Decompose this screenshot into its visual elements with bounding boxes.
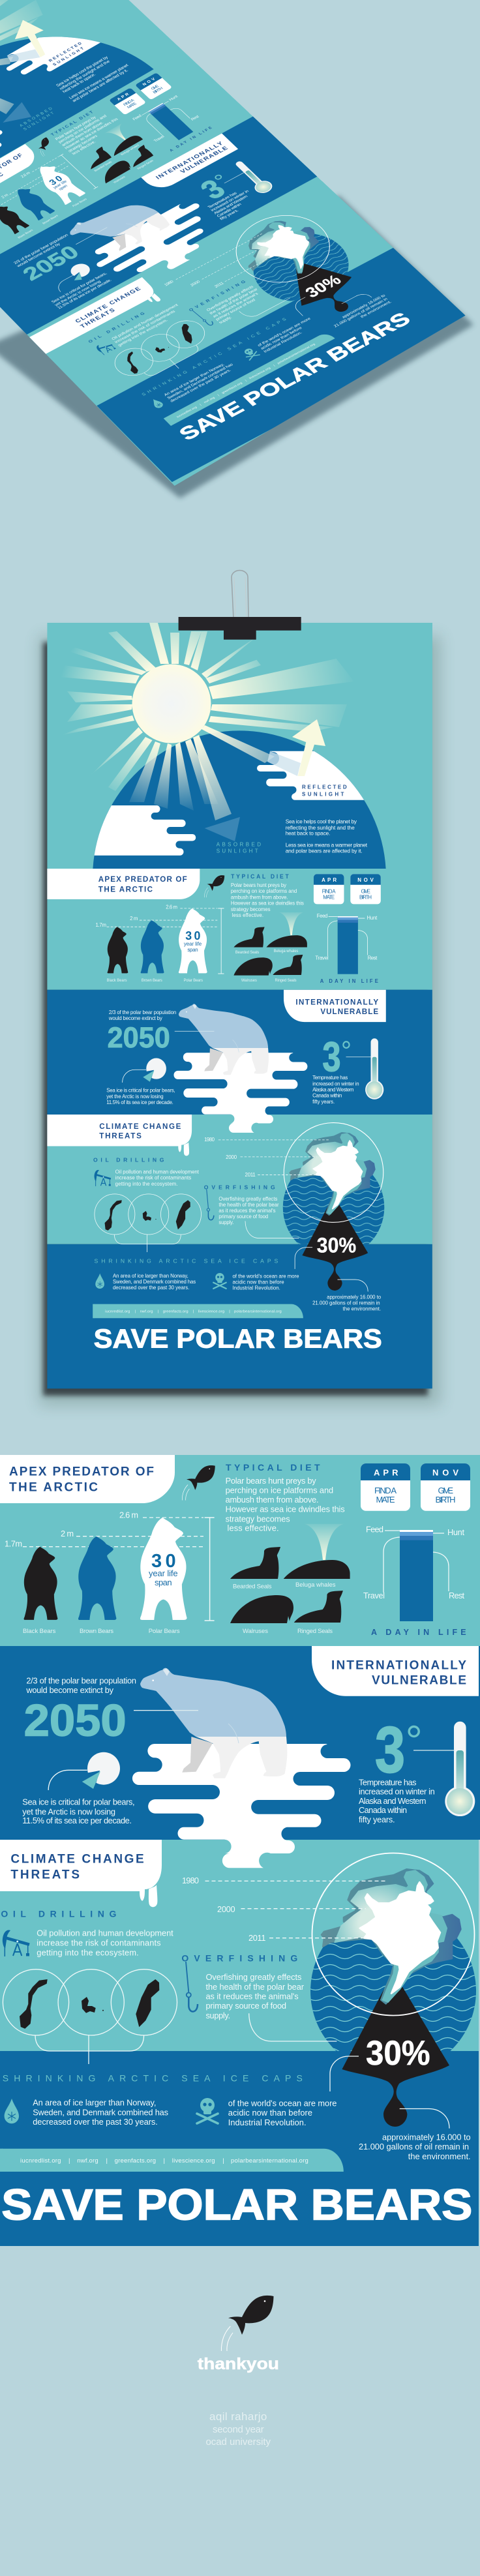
text: ocean acidity: of the world's ocean are more: [228, 2099, 337, 2108]
ice timeline labels: 2011: [248, 1933, 266, 1943]
text: typical diet: [226, 1476, 345, 1533]
label: absorbed sunlight: ABSORBED: [217, 841, 261, 847]
polar bear with lifespan: [140, 1518, 187, 1620]
card: april: [361, 1463, 410, 1511]
arctic ice extent 2000: [335, 1870, 447, 2002]
card: november: BIRTH: [436, 1495, 455, 1505]
heading: internationally vulnerable: [312, 1646, 479, 1696]
text: ocean acidity: [228, 2099, 337, 2127]
bear height guides: [5, 1510, 215, 1621]
reflected sunlight arrow: [292, 719, 325, 776]
thermometer: [413, 1722, 475, 1816]
3 degree figure: 3: [375, 1714, 405, 1787]
card: april: FIND A: [374, 1486, 397, 1495]
day in life bar: Travel: [363, 1591, 385, 1600]
heading: apex predator: THE ARCTIC: [9, 1481, 98, 1495]
text: overfishing: [206, 1972, 305, 2020]
heading: shrinking arctic sea ice caps: SHRINKING ARCTIC SEA ICE CAPS: [3, 2073, 303, 2084]
card: november: NOV: [432, 1468, 458, 1478]
black bear: [24, 1547, 57, 1620]
bear height guides: 1.7m: [5, 1539, 22, 1549]
text: extinction: [25, 1676, 136, 1695]
heading: internationally vulnerable: VULNERABLE: [372, 1673, 466, 1687]
connector: 30%: [330, 2056, 359, 2091]
text: temperature: Alaska and Western: [359, 1796, 427, 1806]
text: temperature: [359, 1777, 435, 1824]
polar bear with lifespan: 30: [151, 1551, 176, 1572]
sources strip: polarbearsinternational.org: [231, 2157, 308, 2164]
sun rays: [51, 623, 354, 820]
text: sea ice loss: [22, 1797, 135, 1825]
day in life bar: Rest: [449, 1591, 464, 1600]
sources strip: |: [163, 2157, 165, 2164]
text: oil drilling: [37, 1928, 173, 1957]
text: typical diet: perching on ice platforms and: [226, 1485, 333, 1495]
prey labels: Walruses: [243, 1628, 268, 1635]
text: gallons of oil: [359, 2132, 471, 2161]
arctic ice extent 1980: [322, 1869, 461, 2004]
detail: apex predator section: [0, 1455, 480, 1646]
sources strip: [0, 2149, 344, 2172]
heading: climate change threats: CLIMATE CHANGE: [10, 1853, 144, 1866]
connector: 2050: [134, 1710, 198, 1711]
main title: SAVE POLAR BEARS: [1, 2181, 472, 2229]
polar bear with lifespan: year life: [149, 1568, 178, 1578]
bear eye and ear: [152, 1668, 239, 1743]
text: sea ice loss: 11.5% of its sea ice per decade.: [22, 1816, 132, 1825]
poster mockup shadow: [0, 196, 473, 498]
ringed seal: [294, 1591, 343, 1623]
text: temperature: Tempreature has: [359, 1777, 416, 1787]
arctic ice today: [360, 1882, 440, 1994]
walking polar bear: [140, 1668, 287, 1778]
text: overfishing: as it reduces the animal's: [206, 1992, 299, 2001]
walrus: [230, 1595, 293, 1623]
sources strip: |: [68, 2157, 70, 2164]
day in life bar: [363, 1524, 464, 1621]
label: absorbed sunlight: SUNLIGHT: [217, 848, 258, 854]
polar bear with lifespan: span: [155, 1578, 172, 1587]
text: gallons of oil: approximately 16.000 to: [382, 2132, 471, 2142]
heading: typical diet: TYPICAL DIET: [226, 1462, 320, 1473]
ice timeline labels: 1980: [182, 1876, 199, 1885]
text: sea ice cools planet: Less sea ice means a warmer planet: [286, 842, 368, 848]
label: absorbed sunlight: [217, 841, 261, 854]
text: oil drilling: increase the risk of contaminants: [37, 1938, 160, 1947]
dome of sea: [93, 730, 386, 869]
text: temperature: fifty years.: [359, 1814, 395, 1824]
card: april: APR: [374, 1468, 398, 1478]
bear labels: [23, 1628, 180, 1635]
whale spout: [305, 1524, 344, 1560]
text: overfishing: primary source of food: [206, 2001, 286, 2011]
heading: internationally vulnerable: INTERNATIONALLY: [331, 1658, 466, 1672]
text: overfishing: Overfishing greatly effects: [206, 1972, 301, 1982]
icon: ice pie: [48, 1752, 120, 1790]
bear labels: Brown Bears: [80, 1628, 113, 1635]
2050 figure: 2050: [24, 1696, 127, 1745]
sources strip: |: [106, 2157, 108, 2164]
text: sea ice cools planet: reflecting the sunlight and the: [286, 824, 355, 831]
heading: apex predator: APEX PREDATOR OF: [9, 1465, 154, 1479]
prey labels: Ringed Seals: [297, 1628, 333, 1635]
text: sea ice loss: Sea ice is critical for polar bears,: [22, 1797, 135, 1806]
card: november: [421, 1463, 470, 1511]
text: oil drilling: Oil pollution and human development: [37, 1928, 173, 1938]
icon: fish hook: [186, 1962, 198, 2012]
author credit: ocad university: [206, 2436, 271, 2448]
sources strip: greenfacts.org: [115, 2157, 156, 2164]
bear labels: Black Bears: [23, 1628, 56, 1635]
text: ice area: Sweden, and Denmark combined has: [33, 2108, 168, 2117]
thin ring around ice: [312, 1853, 475, 2015]
author credit: [206, 2410, 271, 2448]
text: temperature: increased on winter in: [359, 1787, 435, 1797]
prey labels: [233, 1581, 336, 1635]
text: typical diet: strategy becomes: [226, 1514, 290, 1523]
connector: oil drop: [400, 2109, 449, 2129]
text: oil drilling: getting into the ecosystem.: [37, 1947, 139, 1957]
heading: climate change threats: [0, 1840, 162, 1907]
icon: skull and bones: [197, 2098, 218, 2123]
text: gallons of oil: 21.000 gallons of oil remain in: [359, 2142, 469, 2151]
icon: fish: [182, 1465, 215, 1501]
venn circles: norway, denmark, sweden: [3, 1969, 177, 2064]
far leg of bear: [182, 1737, 213, 1773]
oil drop with black flask: [342, 1971, 449, 2127]
label: reflected sunlight: SUNLIGHT: [302, 792, 344, 798]
poster mockup in perspective: [0, 0, 472, 486]
heading: a day in life: A DAY IN LIFE: [371, 1628, 466, 1637]
text: ocean acidity: acidic now than before: [228, 2108, 312, 2118]
card: november: GIVE: [438, 1486, 453, 1495]
heading: apex predator: [0, 1455, 175, 1503]
sources strip: iucnredlist.org: [20, 2157, 61, 2164]
text: sea ice loss: yet the Arctic is now losing: [22, 1806, 115, 1816]
text: temperature: Canada within: [359, 1805, 407, 1815]
text: ice area: [33, 2098, 168, 2127]
sun: [132, 664, 211, 743]
heading: climate change threats: THREATS: [10, 1868, 80, 1882]
prey labels: Bearded Seals: [233, 1583, 272, 1591]
bearded seal: [230, 1547, 280, 1579]
text: extinction: would become extinct by: [25, 1685, 114, 1695]
heading: overfishing: OVERFISHING: [181, 1953, 297, 1964]
beluga whale: [284, 1560, 350, 1579]
hanging poster lower sections: [47, 869, 432, 1388]
hanging poster shadow: [39, 636, 440, 1405]
text: sea ice cools planet: heat back to space.: [286, 830, 330, 837]
text: ice area: decreased over the past 30 years.: [33, 2117, 158, 2127]
text: sea ice cools planet: [286, 818, 368, 854]
sources strip: nwf.org: [77, 2157, 98, 2164]
label: reflected sunlight: [302, 784, 347, 798]
ice timeline labels: [182, 1876, 386, 1943]
bear height guides: 2.6 m: [119, 1510, 138, 1520]
heading: oil drilling: OIL DRILLING: [1, 1908, 117, 1919]
30% figure: 30%: [366, 2034, 430, 2073]
text: typical diet: ambush them from above.: [226, 1495, 319, 1505]
binder clip: [179, 571, 301, 640]
melting ice sheet: [132, 1744, 350, 1868]
text: ocean acidity: Industrial Revolution.: [228, 2118, 307, 2127]
text: typical diet: less effective.: [227, 1523, 279, 1533]
bear labels: Polar Bears: [149, 1628, 180, 1635]
text: overfishing: supply.: [206, 2011, 230, 2020]
text: typical diet: Polar bears hunt preys by: [226, 1476, 316, 1486]
connector: overfishing: [249, 2013, 337, 2041]
brown bear: [78, 1536, 116, 1620]
reflected streak on ice: [267, 751, 301, 776]
sources strip: livescience.org: [172, 2157, 215, 2164]
day in life bar: Hunt: [447, 1527, 464, 1537]
text: ice area: An area of ice larger than Norway,: [33, 2098, 156, 2108]
text: extinction: 2/3 of the polar bear population: [26, 1676, 136, 1686]
detail: internationally vulnerable section: [0, 1646, 480, 1868]
text: sea ice cools planet: and polar bears are affected by it.: [286, 848, 363, 854]
ice timeline labels: 2000: [217, 1904, 235, 1914]
author credit: aqil raharjo: [209, 2410, 267, 2423]
sources strip: |: [222, 2157, 224, 2164]
day in life bar: Feed: [366, 1524, 383, 1534]
card: april: MATE: [376, 1495, 395, 1505]
thank you: thankyou: [198, 2355, 279, 2373]
icon: oil pump: [3, 1930, 29, 1956]
text: gallons of oil: the environment.: [408, 2151, 471, 2161]
text: overfishing: the health of the polar bear: [206, 1982, 305, 1992]
bear height guides: 2 m: [61, 1529, 74, 1538]
absorbed sunlight arrow: [205, 817, 240, 841]
closing credits: [198, 2296, 279, 2448]
ice floes on dome: [65, 751, 404, 856]
prey labels: Beluga whales: [295, 1581, 336, 1589]
wave circle: [310, 1908, 476, 2074]
text: sea ice cools planet: Sea ice helps cool the planet by: [286, 818, 357, 825]
text: typical diet: However as sea ice dwindles this: [226, 1504, 345, 1514]
icon: ice drop: [5, 2099, 19, 2123]
hanging poster top: sun and dome: [47, 623, 432, 869]
detail: climate section: [0, 1840, 480, 2286]
label: reflected sunlight: REFLECTED: [302, 784, 347, 790]
author credit: second year: [213, 2424, 264, 2435]
icon: leaping fish: [221, 2296, 274, 2351]
